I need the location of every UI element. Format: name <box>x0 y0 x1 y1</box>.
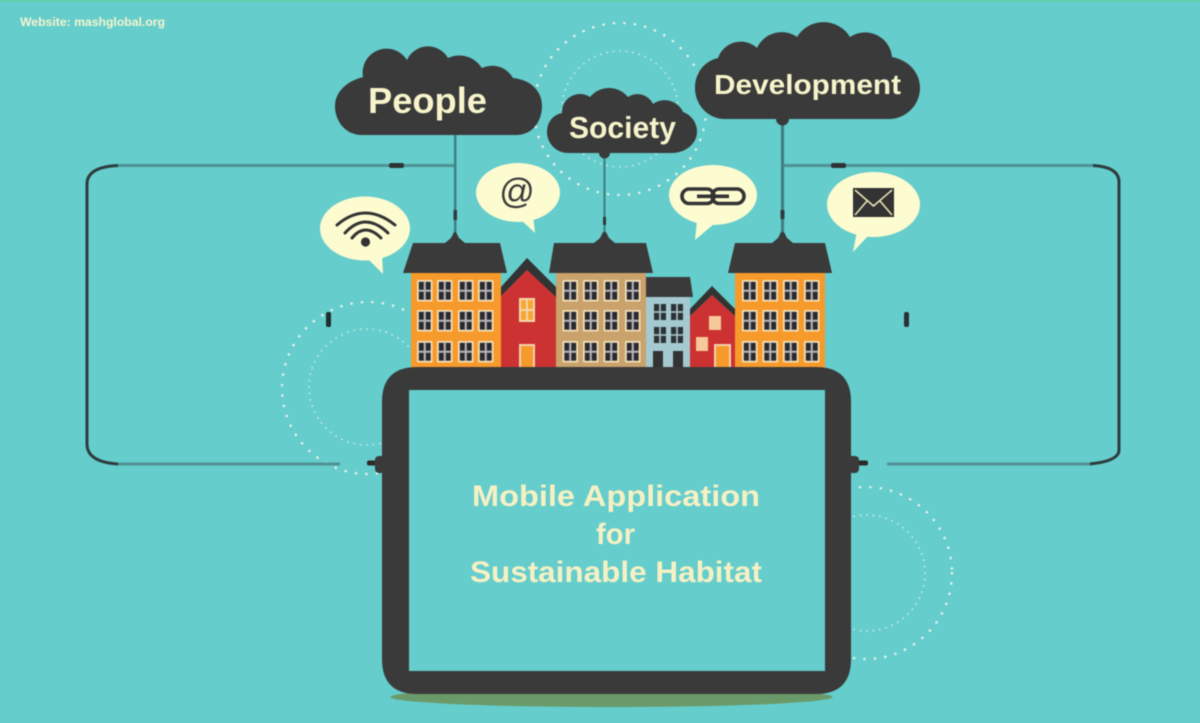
house: light blue <box>646 277 693 368</box>
tablet title <box>470 480 762 589</box>
building: left orange <box>403 232 507 368</box>
icon: envelope <box>853 188 894 217</box>
icon: wifi <box>337 213 395 247</box>
cloud: Development <box>695 22 920 126</box>
cloud: Society <box>547 88 697 158</box>
speech bubble: link <box>669 165 757 240</box>
cloud label: People: People <box>368 80 487 121</box>
dotted circles: top <box>534 23 706 195</box>
speech bubble: mail <box>827 172 920 252</box>
cloud label: Society: Society <box>569 110 677 145</box>
tablet shadow <box>390 687 832 707</box>
icon: at sign: @ <box>499 172 535 211</box>
speech bubble: at sign <box>476 163 560 233</box>
left connector frame <box>87 163 455 464</box>
dotted circles: right <box>780 487 952 659</box>
dotted circles: left <box>282 302 454 474</box>
website label: Website: mashglobal.org <box>20 17 165 29</box>
tablet title: for <box>596 518 635 551</box>
tablet title: Mobile Application <box>472 480 760 513</box>
stems from clouds to buildings <box>454 119 784 235</box>
building: centre tan <box>549 232 653 368</box>
icon: chain link <box>682 189 744 204</box>
tablet title: Sustainable Habitat <box>470 556 762 589</box>
house: small red <box>690 286 735 368</box>
speech bubble: wifi <box>320 196 410 274</box>
cloud label: Development: Development <box>714 69 901 100</box>
top edge strip <box>0 0 1200 2</box>
cloud: People <box>335 46 542 135</box>
right connector frame <box>782 163 1119 464</box>
tablet <box>367 367 868 694</box>
house: red <box>501 258 556 368</box>
building: right orange <box>728 232 832 368</box>
